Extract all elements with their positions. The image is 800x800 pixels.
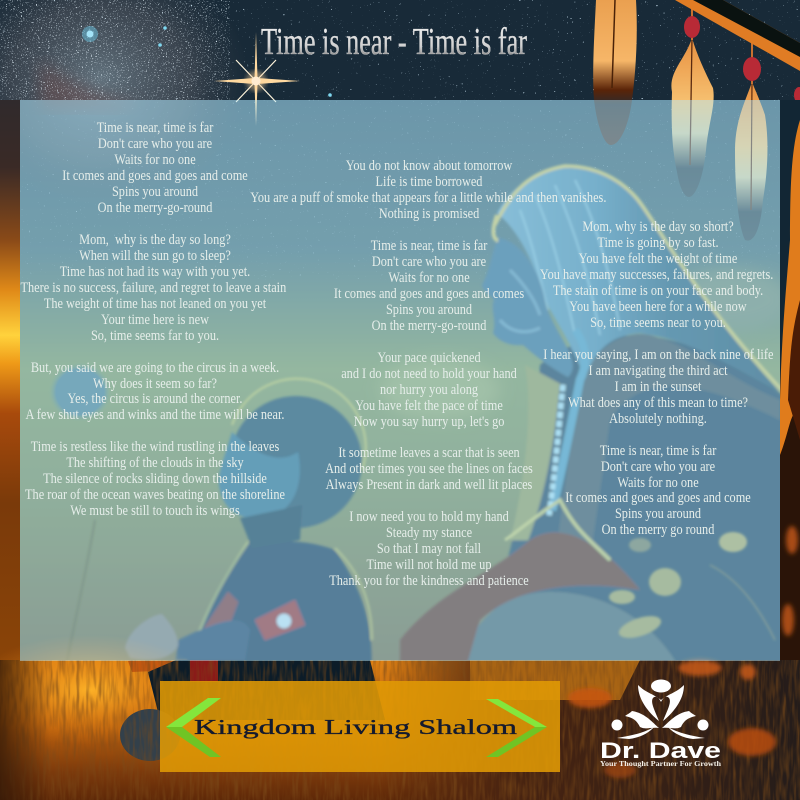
poem column 3: You have felt the weight of time: [579, 251, 737, 267]
poem column 3: Absolutely nothing.: [609, 411, 707, 427]
poem column 3: I hear you saying, I am on the back nine of life: [543, 347, 773, 363]
poem column 3: Mom, why is the day so short?: [582, 219, 734, 235]
poem column 2: Time will not hold me up: [367, 557, 491, 573]
logo: Dr. Dave: [600, 680, 721, 768]
poem column 2: Don't care who you are: [372, 254, 486, 270]
banner text: Kingdom Living Shalom: [194, 715, 517, 739]
guiding star: [214, 32, 300, 126]
poem column 2: It comes and goes and goes and comes: [334, 286, 524, 302]
poem column 2: On the merry-go-round: [372, 318, 486, 334]
icon: left chevron arrow: [166, 698, 221, 757]
poem column 3: The stain of time is on your face and body.: [553, 283, 763, 299]
poem column 1: But, you said we are going to the circus in a week.: [31, 360, 279, 376]
logo icon: [612, 680, 708, 739]
poem column 2: Now you say hurry up, let's go: [354, 414, 504, 430]
title: Time is near - Time is far: [261, 21, 527, 63]
poem column 3: You have been here for a while now: [569, 299, 747, 315]
feathers and beads: [593, 0, 800, 241]
poem column 2: You do not know about tomorrow: [346, 158, 512, 174]
poem column 1: On the merry-go-round: [98, 200, 212, 216]
poem column 3: Don't care who you are: [601, 459, 715, 475]
poem column 2: nor hurry you along: [380, 382, 478, 398]
hanging branch: [675, 0, 800, 71]
poem column 3: Waits for no one: [617, 474, 699, 490]
poem column 2: Always Present in dark and well lit places: [326, 477, 532, 493]
poem column 1: The shifting of the clouds in the sky: [66, 455, 244, 471]
poem column 1: We must be still to touch its wings: [70, 503, 240, 519]
poem column 1: Yes, the circus is around the corner.: [67, 391, 243, 407]
sunlit grass ground: [0, 635, 800, 800]
pale moon shape behind the boy: [48, 362, 112, 422]
boy: [125, 379, 372, 690]
poem column 2: [250, 158, 606, 589]
poem column 1: Why does it seem so far?: [93, 376, 217, 392]
poem column 3: You have many successes, failures, and regrets.: [540, 267, 773, 283]
poem column 1: It comes and goes and goes and come: [62, 168, 248, 184]
poem column 1: The weight of time has not leaned on you yet: [44, 296, 266, 312]
pale meadow flowers behind panel: [60, 520, 775, 700]
translucent poem panel: [20, 100, 780, 661]
poem column 1: Time is restless like the wind rustling in the leaves: [31, 439, 279, 455]
poem column 2: Steady my stance: [386, 525, 472, 541]
poem column 3: What does any of this mean to time?: [568, 395, 748, 411]
poem column 3: [540, 219, 774, 538]
poem column 1: Spins you around: [112, 184, 198, 200]
banner: Kingdom Living Shalom: [160, 681, 560, 772]
poem column 2: Your pace quickened: [377, 350, 481, 366]
left edge sunset glow: [0, 100, 20, 660]
poem column 2: Waits for no one: [388, 270, 470, 286]
poem column 1: A few shut eyes and winks and the time will be near.: [26, 407, 284, 423]
poem column 1: [20, 120, 286, 519]
poem column 3: So, time seems near to you.: [590, 315, 726, 331]
poem column 3: Time is going by so fast.: [597, 235, 719, 251]
poem column 2: And other times you see the lines on faces: [325, 461, 533, 477]
icon: right chevron arrow: [486, 699, 547, 757]
poem column 2: It sometime leaves a scar that is seen: [338, 445, 520, 461]
poem column 1: So, time seems far to you.: [91, 328, 219, 344]
elder woman: [400, 166, 800, 800]
poem column 3: Time is near, time is far: [600, 443, 716, 459]
poem column 1: The silence of rocks sliding down the hillside: [43, 471, 267, 487]
soft clouds behind the elder: [380, 270, 790, 420]
poem column 2: Life is time borrowed: [376, 174, 482, 190]
right edge hair and shadow: [780, 100, 800, 660]
poem column 3: On the merry go round: [602, 522, 714, 538]
poem column 2: You have felt the pace of time: [355, 398, 503, 414]
poem column 2: Spins you around: [386, 302, 472, 318]
poem column 1: Your time here is new: [101, 312, 209, 328]
poem column 2: Time is near, time is far: [371, 238, 487, 254]
logo tagline: Your Thought Partner For Growth: [600, 760, 721, 768]
poem column 1: Don't care who you are: [98, 136, 212, 152]
poem column 2: and I do not need to hold your hand: [341, 366, 517, 382]
poem column 1: Mom, why is the day so long?: [79, 232, 231, 248]
poem column 3: I am in the sunset: [615, 379, 701, 395]
poem column 1: There is no success, failure, and regret to leave a stain: [21, 280, 286, 296]
poem column 1: Waits for no one: [114, 152, 196, 168]
poem column 2: Nothing is promised: [379, 206, 479, 222]
poem column 3: Spins you around: [615, 506, 701, 522]
poem column 2: I now need you to hold my hand: [349, 509, 509, 525]
poem column 2: Thank you for the kindness and patience: [329, 573, 529, 589]
poem column 2: So that I may not fall: [377, 541, 481, 557]
poem column 3: It comes and goes and goes and come: [565, 490, 751, 506]
poem column 1: When will the sun go to sleep?: [79, 248, 231, 264]
poem column 1: Time has not had its way with you yet.: [60, 264, 250, 280]
poem column 2: You are a puff of smoke that appears for a little while and then vanishes.: [250, 190, 606, 206]
logo name: Dr. Dave: [600, 738, 721, 763]
poem column 3: I am navigating the third act: [588, 363, 728, 379]
poem column 1: Time is near, time is far: [97, 120, 213, 136]
poem column 1: The roar of the ocean waves beating on the shoreline: [25, 487, 285, 503]
